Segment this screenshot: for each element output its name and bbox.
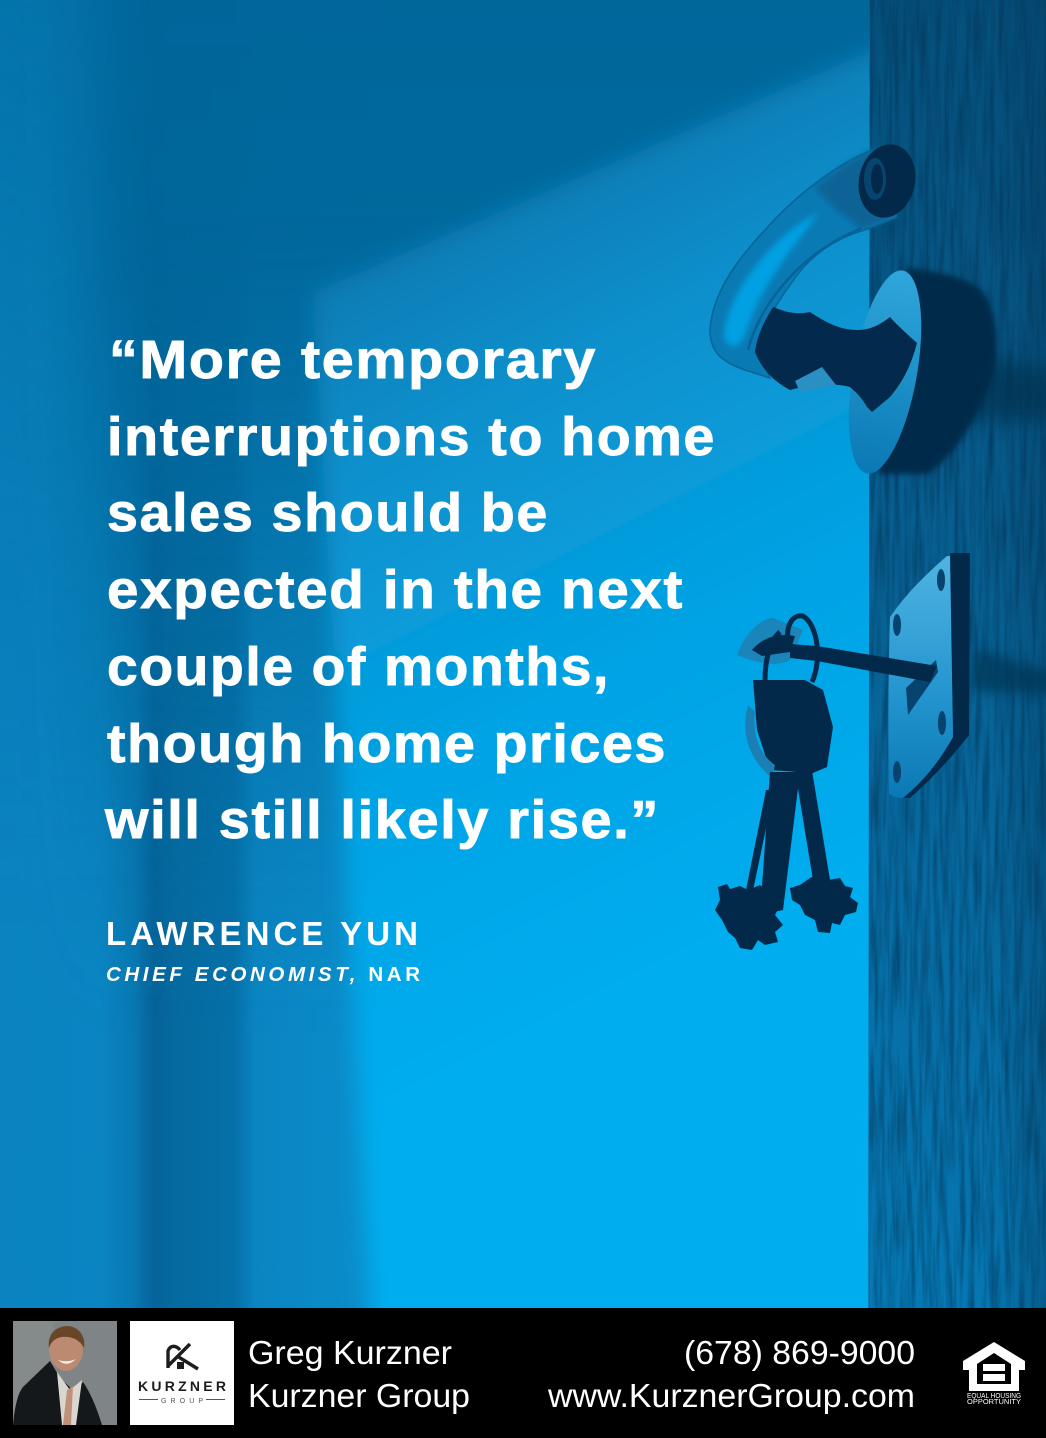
- Kurzner Group logo: GROUP: [161, 1398, 203, 1405]
- background: blurred room wall: [0, 0, 870, 1308]
- Kurzner Group logo: [130, 1321, 234, 1425]
- quote text: couple of months,: [107, 637, 610, 697]
- icon: equal housing opportunity: OPPORTUNITY: [967, 1397, 1021, 1406]
- icon: equal housing opportunity: [963, 1342, 1025, 1406]
- quote text: “More temporary: [109, 330, 597, 390]
- company name: Kurzner Group: [248, 1378, 470, 1415]
- website: www.KurznerGroup.com: [547, 1378, 915, 1415]
- icon: equal housing opportunity: EQUAL HOUSING: [967, 1391, 1021, 1400]
- quote text: though home prices: [107, 714, 667, 774]
- quote text: will still likely rise.”: [104, 790, 660, 850]
- quote text: [104, 330, 716, 850]
- key plate on door: [888, 553, 1046, 798]
- attribution name: LAWRENCE YUN: [106, 915, 418, 952]
- footer bar: [0, 1308, 1046, 1438]
- agent name: Greg Kurzner: [248, 1335, 452, 1372]
- phone number: (678) 869-9000: [684, 1335, 915, 1372]
- quote text: interruptions to home: [107, 407, 716, 467]
- quote text: sales should be: [107, 483, 549, 543]
- Kurzner Group logo: KURZNER: [138, 1378, 226, 1394]
- agent photo: [13, 1321, 117, 1425]
- bunch of keys: [715, 616, 937, 950]
- attribution title: CHIEF ECONOMIST, NAR: [106, 963, 420, 986]
- door handle: [710, 139, 1046, 479]
- quote text: expected in the next: [107, 560, 684, 620]
- door edge with wood grain: [868, 0, 1046, 1308]
